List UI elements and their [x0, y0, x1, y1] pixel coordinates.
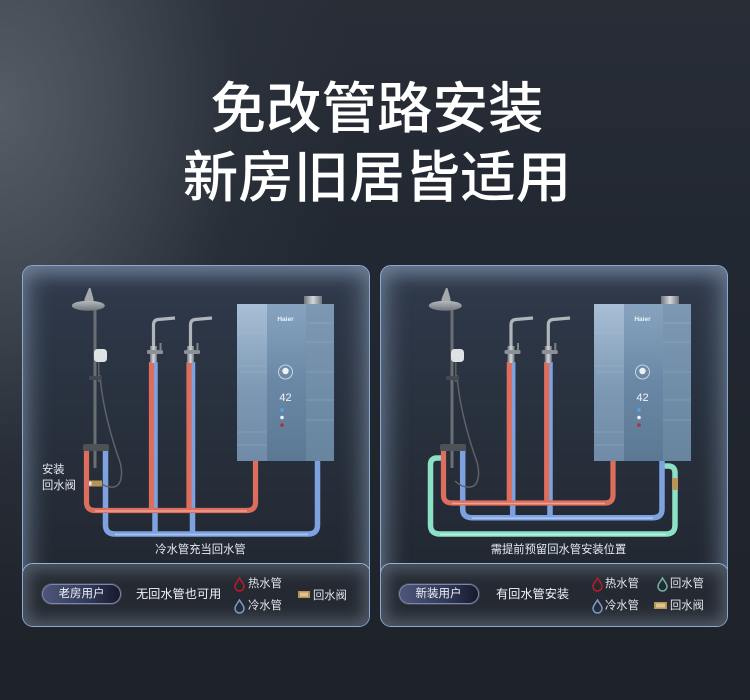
- water heater: 42: [279, 392, 291, 404]
- water heater: 42: [636, 392, 648, 404]
- panel: old home users: [22, 265, 370, 627]
- icon: cold water drop: [592, 599, 603, 614]
- caption: 需提前预留回水管安装位置: [491, 544, 626, 556]
- plumbing diagram: old home: [42, 288, 334, 537]
- shower set: [428, 288, 478, 487]
- icon: cold water drop: [234, 599, 245, 614]
- user tag: [42, 584, 121, 604]
- hot water pipe: [443, 362, 612, 503]
- water heater: [236, 296, 334, 460]
- icon: hot water drop: [234, 577, 245, 592]
- shower set: [71, 288, 121, 487]
- icon: return valve: [654, 602, 667, 609]
- legend: return valve: 回水阀: [670, 600, 704, 612]
- icon: return water drop: [657, 577, 668, 592]
- faucet 1: [146, 318, 174, 362]
- user tag: 新装用户: [416, 588, 462, 600]
- legend: hot water: 热水管: [248, 578, 282, 590]
- faucet 2: [541, 318, 570, 362]
- return valve: [672, 478, 678, 490]
- cold water pipe: [105, 362, 317, 534]
- legend: cold water: 冷水管: [605, 600, 639, 612]
- title line 1: 免改管路安装: [210, 78, 544, 140]
- legend: cold water: 冷水管: [248, 600, 282, 612]
- return water pipe: [430, 458, 674, 534]
- legend: return valve: 回水阀: [313, 590, 347, 602]
- legend: hot water: 热水管: [605, 578, 639, 590]
- user tag: 老房用户: [58, 588, 104, 600]
- panel: new home users: [380, 265, 728, 627]
- cold water pipe: [462, 362, 662, 518]
- legend: return water: 回水管: [670, 578, 704, 590]
- water heater: Haier: [634, 316, 651, 322]
- label: install return valve: 回水阀: [42, 478, 75, 492]
- water heater: [594, 296, 690, 460]
- icon: hot water drop: [592, 577, 603, 592]
- description: 有回水管安装: [496, 587, 569, 601]
- hot water pipe: [86, 362, 255, 510]
- info bar: [22, 563, 370, 627]
- plumbing diagram: new home: [428, 288, 691, 537]
- icon: return valve: [298, 591, 310, 598]
- caption: 冷水管充当回水管: [155, 544, 246, 556]
- user tag: [398, 584, 478, 604]
- info bar: [380, 563, 728, 627]
- water heater: Haier: [277, 316, 294, 322]
- faucet 1: [504, 318, 532, 362]
- faucet 2: [184, 318, 212, 362]
- description: 无回水管也可用: [136, 587, 221, 601]
- title line 2: 新房旧居皆适用: [183, 147, 571, 209]
- label: install return valve: 安装: [42, 462, 64, 476]
